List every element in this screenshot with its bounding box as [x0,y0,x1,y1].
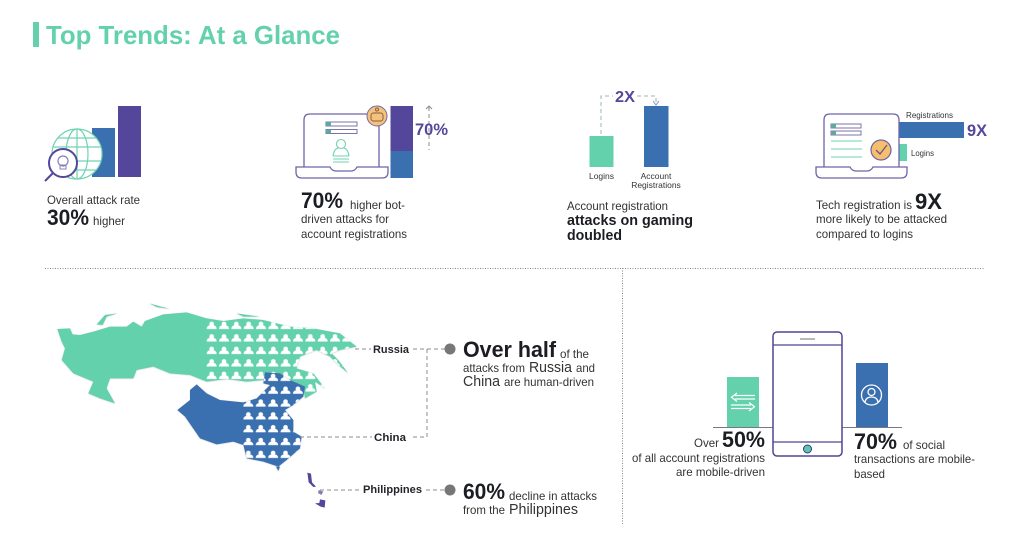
icon: laptop with checkmark [816,114,907,178]
chart: stacked bar 70%: 70% [415,120,448,139]
text: 60% decline [463,479,597,518]
text: 60% decline: 60% [463,479,505,504]
text: 60% decline: Philippines [509,501,578,518]
text: bot-driven attacks [301,188,407,241]
chart: logins vs account registrations: Logins [589,171,614,181]
text: over 50%: Over [694,436,719,450]
icon: user circle [862,385,882,405]
chart: rising bars with globe [52,106,141,179]
text: tech registration: 9X [915,189,942,214]
chart: stacked bar 70% [390,106,448,178]
text: overall attack rate: Overall attack rate [47,193,140,207]
text: gaming registrations: Account registration [567,199,668,213]
text: 70% social: of social [903,438,945,452]
text: 60% decline: from the [463,503,505,517]
text: over half human-driven: Russia [529,359,573,376]
text: gaming registrations: attacks on gaming [567,213,693,229]
label: Philippines: Philippines [363,484,422,496]
text: bot-driven attacks: driven attacks for [301,212,389,226]
chart: registrations vs logins bars [899,110,988,161]
text: over half human-driven: and [576,361,595,375]
text: 70% social: transactions are mobile- [854,452,975,466]
text: overall attack rate: 30% [47,205,89,230]
chart: registrations vs logins bars: 9X [967,121,988,140]
text: tech registration: compared to logins [816,227,913,241]
panel: bot-driven attacks [296,106,448,241]
chart: logins vs account registrations: Registrations [631,180,681,190]
text: gaming registrations [567,199,693,244]
chart: registrations vs logins bars: Registrations [906,110,953,120]
text: overall attack rate [47,193,140,230]
connector: Philippines [320,484,456,496]
label: China: China [374,432,407,444]
panel: overall attack rate [45,106,141,230]
chart: registrations vs logins bars: Logins [911,148,934,158]
text: bot-driven attacks: higher bot- [350,198,405,212]
text: over half human-driven: are human-driven [504,375,594,389]
text: tech registration: Tech registration is [816,198,912,212]
map region: China [177,371,307,471]
title: Top Trends: At a Glance [46,20,340,50]
map region: Russia [57,303,362,403]
text: 70% social: 70% [854,429,897,454]
text: 70% social [854,429,975,481]
chart: mobile bars with baseline [713,363,902,428]
panel: mobile [632,332,975,481]
text: overall attack rate: higher [93,214,125,228]
text: over half human-driven: Over half [463,337,557,362]
icon: laptop with registration form [296,114,388,178]
icon: robot badge [367,106,387,126]
chart: logins vs account registrations [589,89,681,190]
text: 70% social: based [854,467,885,481]
map: Russia, China, Philippines [57,303,362,508]
panel: tech registration [816,110,988,241]
chart: logins vs account registrations: 2X [615,89,635,106]
text: over 50%: are mobile-driven [676,465,765,479]
icon: phone [773,332,842,456]
icon: magnifier with skull [45,149,77,181]
text: bot-driven attacks: account registrations [301,227,407,241]
text: gaming registrations: doubled [567,228,622,244]
icon: transfer arrows [731,393,755,411]
label: Russia: Russia [373,344,410,356]
text: bot-driven attacks: 70% [301,188,343,213]
text: over half human-driven [463,337,595,390]
connectors: Russia and China to callout [300,344,456,437]
text: over half human-driven: China [463,373,501,390]
panel: gaming registrations [567,89,693,244]
text: over 50%: 50% [722,427,765,452]
text: over half human-driven: of the [560,347,589,361]
text: over half human-driven: attacks from [463,361,525,375]
text: 60% decline: decline in attacks [509,489,597,503]
text: over 50%: of all account registrations [632,451,765,465]
chart: logins vs account registrations: Account [641,171,672,181]
text: over 50% [632,427,765,479]
text: tech registration [816,189,947,241]
map region: Philippines [307,473,325,508]
text: tech registration: more likely to be attacked [816,212,947,226]
